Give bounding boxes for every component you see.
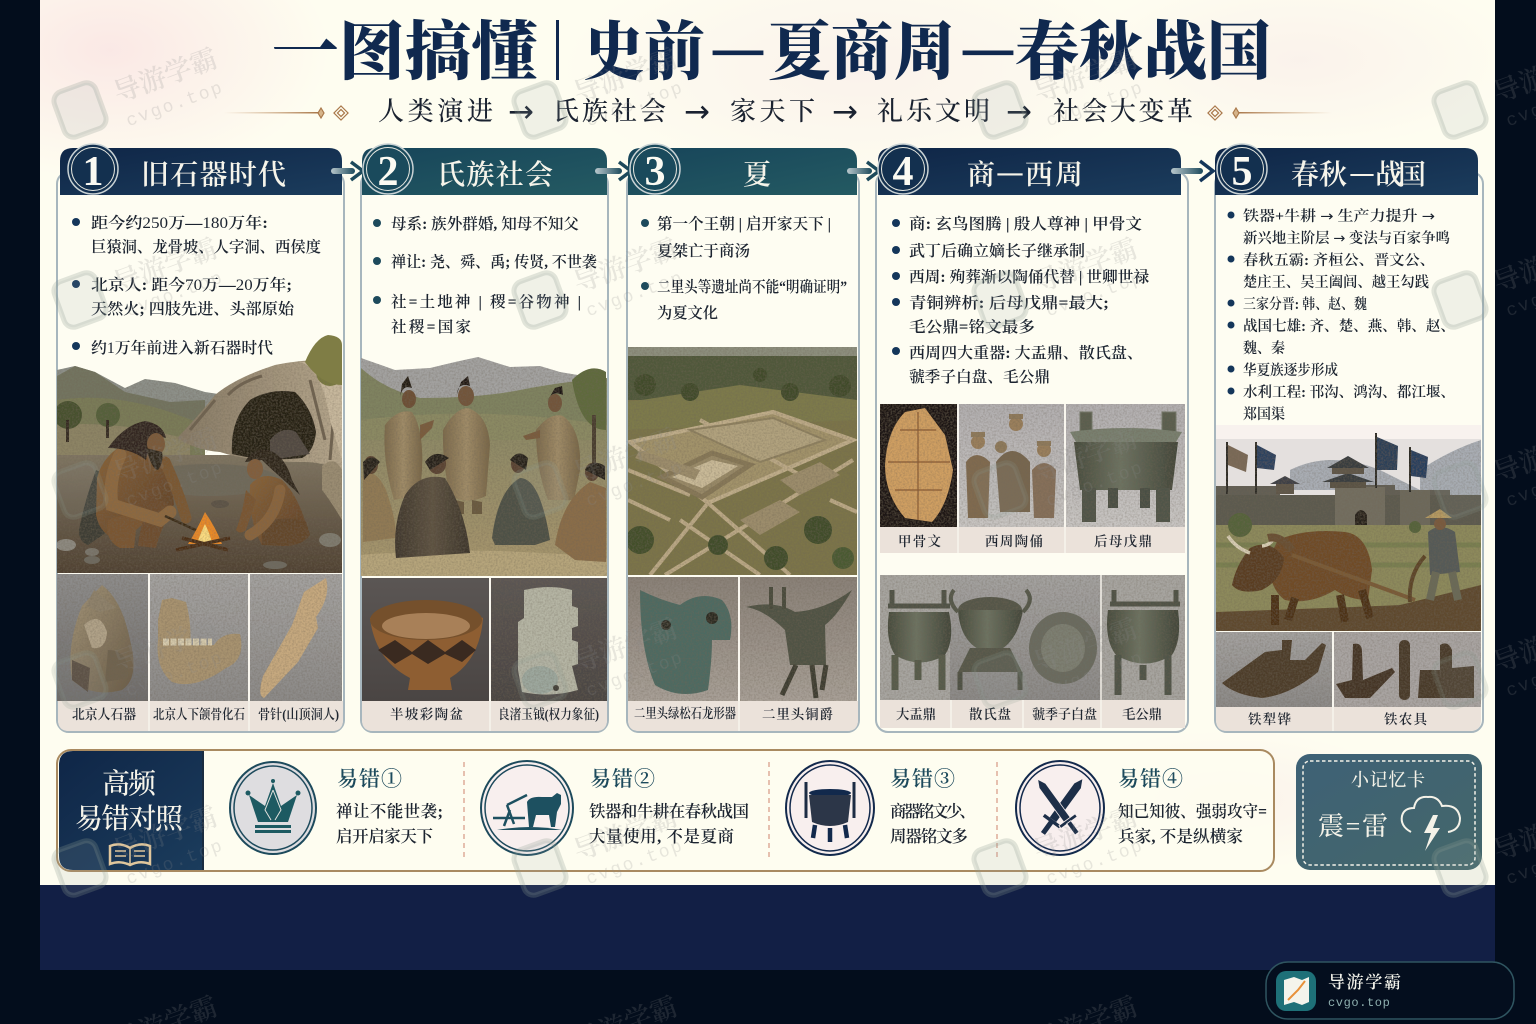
panel 4 upper caption strip: 后母戊鼎 (1094, 533, 1152, 549)
mistake 1: 易错① (337, 767, 402, 791)
panel 4 bullet list: 西周: 殉葬渐以陶俑代替 | 世卿世禄 (909, 267, 1150, 286)
panel 4 heading (967, 159, 1083, 191)
icon: thundercloud (1402, 797, 1460, 851)
mistake 1 (230, 762, 443, 854)
panel 5 header (1215, 148, 1478, 195)
watermarks: 导游学霸 (1030, 801, 1141, 866)
arrow 3 to 4 (847, 162, 879, 180)
panel 3 bullet list (641, 214, 847, 322)
subtitle ornament left (224, 106, 348, 120)
panel 4 lower caption strip: 散氏盘 (969, 706, 1012, 722)
panel 4 frame (876, 172, 1188, 732)
panel 1 caption strip: 北京人石器 (72, 707, 136, 722)
watermarks: cvgo.top (584, 78, 687, 132)
panel 5 caption strip: 铁犁铧 (1248, 711, 1292, 727)
panel 4 bullet list: 西周四大重器: 大盂鼎、散氏盘、 (909, 343, 1143, 362)
title: 一图搞懂 (272, 17, 538, 88)
panel 3 caption strip (628, 577, 858, 731)
ground (57, 455, 342, 573)
watermarks: 导游学霸 (570, 801, 681, 866)
panel 1 artifact: Peking man stone tool (57, 574, 148, 701)
title: — (713, 22, 763, 75)
icon: ox and plough medallion (481, 761, 573, 855)
panel 3 caption strip: 二里头铜爵 (762, 706, 834, 722)
panel 2 bullet list: 母系: 族外群婚, 知母不知父 (391, 215, 579, 233)
mistake 3 (786, 761, 976, 855)
memory card: 小记忆卡 (1351, 770, 1425, 790)
panel 4 heading: 商 (967, 159, 995, 191)
watermarks: 导游学霸 (1030, 423, 1141, 488)
panel 3 number badge (630, 144, 680, 195)
woman (236, 450, 310, 546)
walls (1216, 485, 1481, 520)
mistake 3: 易错③ (890, 767, 955, 791)
watermarks: cvgo.top (1044, 458, 1147, 512)
man (79, 421, 200, 548)
mistake 4: 兵家, 不是纵横家 (1118, 827, 1243, 846)
panel 1 bullet list: 北京人: 距今 70万—20万年; (91, 275, 292, 294)
icon: ding medallion (786, 761, 874, 855)
fire (188, 512, 222, 544)
image: cave and early humans at fire (57, 360, 342, 573)
mistake 4: 知己知彼、强弱攻守= (1118, 802, 1267, 821)
panel 3 header (628, 148, 857, 195)
watermarks: 导游学霸 (1030, 613, 1141, 678)
panel 1 bullet list (72, 213, 321, 357)
panel 2 bullet list: 禅让: 尧、舜、禹; 传贤, 不世袭 (391, 252, 597, 271)
title: 春秋战国 (1015, 17, 1271, 88)
panel 4 heading: 西周 (1025, 159, 1083, 191)
watermarks: 导游学霸 (110, 423, 221, 488)
panel 4 heading: — (997, 160, 1023, 186)
panel 4 lower caption strip: 虢季子白盘 (1032, 706, 1097, 722)
icon: crown medallion (230, 762, 316, 854)
watermarks: 导游学霸 (570, 423, 681, 488)
farmer (1428, 527, 1460, 575)
panel 2 artifact: Liangzhu jade axe (491, 578, 607, 701)
panel 5 bullet list: 魏、秦 (1243, 339, 1285, 357)
panel 4 lower caption strip (880, 575, 1185, 728)
watermarks: cvgo.top (124, 648, 227, 702)
arrow 1 to 2 (331, 162, 363, 180)
mistake 1: 禅让不能世袭; (336, 801, 443, 821)
artifact: four great bronzes (880, 575, 1185, 700)
panel 1 artifact: jaw fossil (150, 574, 248, 701)
panel 1 tree crown overlapping (305, 335, 342, 385)
seated figures (363, 453, 606, 562)
memory card (1296, 754, 1482, 870)
panel 1 header (60, 148, 342, 195)
watermarks: cvgo.top (124, 78, 227, 132)
watermarks: cvgo.top (1044, 268, 1147, 322)
panel 2 number badge (363, 144, 413, 195)
panel 4 upper caption strip: 西周陶俑 (985, 534, 1043, 549)
panel 4 bullet list: 武丁后确立嫡长子继承制 (909, 241, 1085, 260)
divider 1 (463, 762, 465, 860)
panel 5 bullet list: 铁器+牛耕 → 生产力提升 → (1243, 207, 1435, 225)
panel 5 bullet list: 三家分晋: 韩、赵、魏 (1243, 295, 1367, 313)
arrow 4 to 5 (1171, 161, 1213, 181)
site badge (1266, 962, 1514, 1019)
mistake 4 (1016, 761, 1267, 855)
panel 1 caption strip: 骨针(山顶洞人) (258, 706, 339, 722)
panel 5 frame (1215, 172, 1483, 732)
panel 4 number badge (878, 144, 928, 195)
panel 5 number badge: 5 (1232, 149, 1252, 195)
subtitle: → (508, 94, 534, 130)
panel 2 frame (361, 172, 608, 732)
mistake 3: 商器铭文少、 (890, 802, 976, 821)
site badge: 导游学霸 (1328, 973, 1401, 992)
panel 5 caption strip: 铁农具 (1384, 711, 1428, 727)
divider 3 (996, 762, 998, 860)
watermarks: 导游学霸 (570, 233, 681, 298)
logo icon (1276, 971, 1316, 1011)
panel 5 heading: 春秋 (1291, 159, 1347, 191)
panel 5 bullet list: 华夏族逐步形成 (1243, 361, 1338, 379)
panel 3: 夏 (626, 144, 859, 732)
panel 4 lower caption strip: 毛公鼎 (1122, 706, 1162, 722)
watermarks: 导游学霸 (110, 43, 221, 108)
panel 3 artifact: turquoise dragon object (628, 577, 738, 701)
bar label panel: 高频 (102, 768, 157, 800)
panel 1: 旧石器时代 (54, 144, 344, 732)
bar frame (57, 750, 1274, 871)
watermarks: 导游学霸 (1030, 43, 1141, 108)
subtitle: → (1006, 94, 1032, 130)
mistake 4: 易错④ (1118, 767, 1183, 791)
watermarks: cvgo.top (1044, 836, 1147, 890)
watermarks: cvgo.top (124, 836, 227, 890)
watermarks: 导游学霸 (110, 801, 221, 866)
panel 5 caption strip (1216, 632, 1481, 731)
panel 3 bullet list: 夏桀亡于商汤 (657, 241, 750, 260)
panel 5 heading: 战国 (1375, 159, 1426, 191)
subtitle: → (684, 94, 710, 130)
panel 1 caption strip (58, 574, 343, 731)
watermarks: 导游学霸 (570, 613, 681, 678)
bar label panel: 易错对照 (75, 803, 184, 835)
watermarks: 导游学霸 (110, 233, 221, 298)
panel 2 bullet list (373, 215, 597, 336)
panel 2 caption strip: 半坡彩陶盆 (390, 706, 464, 722)
stones (56, 539, 76, 551)
icon: open book (110, 844, 150, 865)
mistake 1: 启开启家天下 (336, 827, 433, 846)
artifact: oracle bone (880, 404, 957, 527)
panel 2 bullet list: 社稷=国家 (391, 318, 471, 336)
panel 4: 商—西周 (876, 144, 1188, 732)
panel 3 heading: 夏 (743, 159, 771, 191)
panel 1 heading: 旧石器时代 (141, 159, 286, 191)
watermarks: cvgo.top (584, 458, 687, 512)
panel 4 bullet list: 毛公鼎=铭文最多 (909, 318, 1035, 336)
panel 2 heading: 氏族社会 (437, 159, 553, 191)
title: 史前 (583, 17, 705, 88)
panel 3 artifact: Erlitou bronze jue (740, 577, 857, 701)
panel 4 bullet list (892, 214, 1150, 386)
subtitle: 社会大变革 (1053, 97, 1193, 126)
panel 5: 春秋—战国 (1215, 144, 1483, 732)
standing figures (384, 376, 580, 514)
panel 1 frame (57, 172, 344, 732)
towers (1322, 456, 1374, 482)
panel 2 caption strip: 良渚玉钺(权力象征) (498, 706, 599, 722)
watermarks: cvgo.top (584, 648, 687, 702)
title (272, 17, 1271, 88)
panel 2 artifact: Banpo painted basin (362, 578, 489, 701)
watermarks: cvgo.top (124, 458, 227, 512)
panel 3 bullet list: 为夏文化 (657, 304, 718, 322)
subtitle (378, 94, 1193, 130)
panel 1 caption strip: 北京人下颌骨化石 (153, 706, 245, 722)
panel 5 bullet list: 春秋五霸: 齐桓公、晋文公、 (1243, 251, 1435, 269)
panel 5 bullet list: 楚庄王、吴王阖闾、越王勾践 (1243, 273, 1429, 291)
panel 5 bullet list: 战国七雄: 齐、楚、燕、韩、赵、 (1243, 317, 1455, 335)
ox (1268, 531, 1372, 601)
panel 5 heading (1291, 159, 1426, 191)
arrow 2 to 3 (595, 162, 631, 180)
watermarks: cvgo.top (124, 268, 227, 322)
panel 2 bullet list: 社=土地神 | 稷=谷物神 | (391, 293, 581, 311)
image: city walls, ox plough and farmer (1216, 425, 1481, 631)
watermarks: cvgo.top (1044, 78, 1147, 132)
panel 2 number badge: 2 (378, 149, 398, 195)
watermarks: 导游学霸 (1030, 233, 1141, 298)
icon: crossed swords medallion (1016, 761, 1104, 855)
mistake 2: 大量使用, 不是夏商 (589, 827, 734, 846)
panel 5 number badge (1217, 144, 1267, 195)
panel 5 artifact: iron farm tools (1334, 632, 1481, 707)
subtitle: 人类演进 (378, 97, 493, 126)
watermarks: cvgo.top (584, 268, 687, 322)
watermarks: cvgo.top (1044, 648, 1147, 702)
panel 5 heading: — (1350, 160, 1374, 185)
panel 3 frame (627, 172, 859, 732)
site badge: cvgo.top (1328, 996, 1390, 1010)
title: — (963, 22, 1013, 75)
subtitle ornament right (1208, 106, 1332, 120)
artifact: Western Zhou pottery figures (959, 404, 1064, 527)
panel 1 artifact: bone needle (250, 574, 342, 701)
mistake 2 (481, 761, 749, 855)
panel 2 caption strip (362, 578, 607, 731)
outer ruins (630, 412, 853, 503)
memory card: 震=雷 (1318, 812, 1388, 841)
field (1216, 525, 1481, 631)
panel 4 lower caption strip: 大盂鼎 (896, 706, 936, 722)
panel 5 bullet list: 新兴地主阶层 → 变法与百家争鸣 (1243, 229, 1450, 247)
panel 1 bullet list: 距今约 250万—180万年: (91, 213, 268, 232)
artifact: Houmuwu ding (1066, 404, 1185, 527)
panel 4 header (878, 148, 1181, 195)
subtitle: → (832, 94, 858, 130)
image: Erlitou site aerial view (628, 347, 857, 575)
watermarks: cvgo.top (584, 836, 687, 890)
panel 2: 氏族社会 (361, 144, 608, 732)
mistake 2: 易错② (590, 767, 655, 791)
watermarks: 导游学霸 (110, 613, 221, 678)
panel 4 bullet list: 商: 玄鸟图腾 | 殷人尊神 | 甲骨文 (909, 214, 1143, 233)
panel 3 caption strip: 二里头绿松石龙形器 (634, 705, 736, 721)
subtitle: 氏族社会 (553, 97, 666, 126)
panel 1 bullet list: 巨猿洞、龙骨坡、人字洞、西侯度 (91, 237, 321, 256)
panel 3 bullet list: 二里头等遗址尚不能“明确证明” (657, 277, 847, 296)
panel 4 number badge: 4 (892, 149, 914, 195)
far mountains (57, 366, 225, 440)
subtitle: 礼乐文明 (877, 97, 990, 126)
panel 5 artifact: iron plough share (1216, 632, 1332, 707)
panel 5 bullet list: 水利工程: 邗沟、鸿沟、都江堰、 (1243, 383, 1455, 401)
panel 4 bullet list: 青铜辨析: 后母戊鼎=最大; (909, 293, 1109, 312)
watermarks: 导游学霸 (570, 43, 681, 108)
mistake 3: 周器铭文多 (890, 827, 968, 846)
flags (1226, 442, 1228, 494)
panel 3 bullet list: 第一个王朝 | 启开家天下 | (657, 214, 831, 233)
navy footer band (40, 885, 1495, 970)
panel 1 number badge (68, 144, 118, 195)
title: 夏商周 (768, 17, 956, 88)
panel 5 bullet list: 郑国渠 (1243, 405, 1285, 423)
panel 1 bullet list: 天然火; 四肢先进、头部原始 (91, 299, 296, 318)
mistake 2: 铁器和牛耕在春秋战国 (589, 802, 749, 821)
subtitle: 家天下 (730, 97, 815, 126)
divider 2 (768, 762, 770, 860)
bar label panel (59, 751, 204, 870)
panel 3 number badge: 3 (644, 149, 666, 195)
panel 1 number badge: 1 (82, 149, 104, 195)
panel 4 upper caption strip (880, 404, 1185, 553)
panel 5 bullet list (1228, 207, 1455, 423)
bottom bar: high-frequency mistakes (57, 750, 1274, 871)
panel 4 upper caption strip: 甲骨文 (898, 534, 942, 549)
panel 1 bullet list: 约1万年前进入新石器时代 (91, 338, 273, 357)
panel 2 header (362, 148, 607, 195)
panel 4 bullet list: 虢季子白盘、毛公鼎 (909, 367, 1050, 386)
cave (177, 360, 342, 470)
image: clan council (361, 357, 607, 576)
